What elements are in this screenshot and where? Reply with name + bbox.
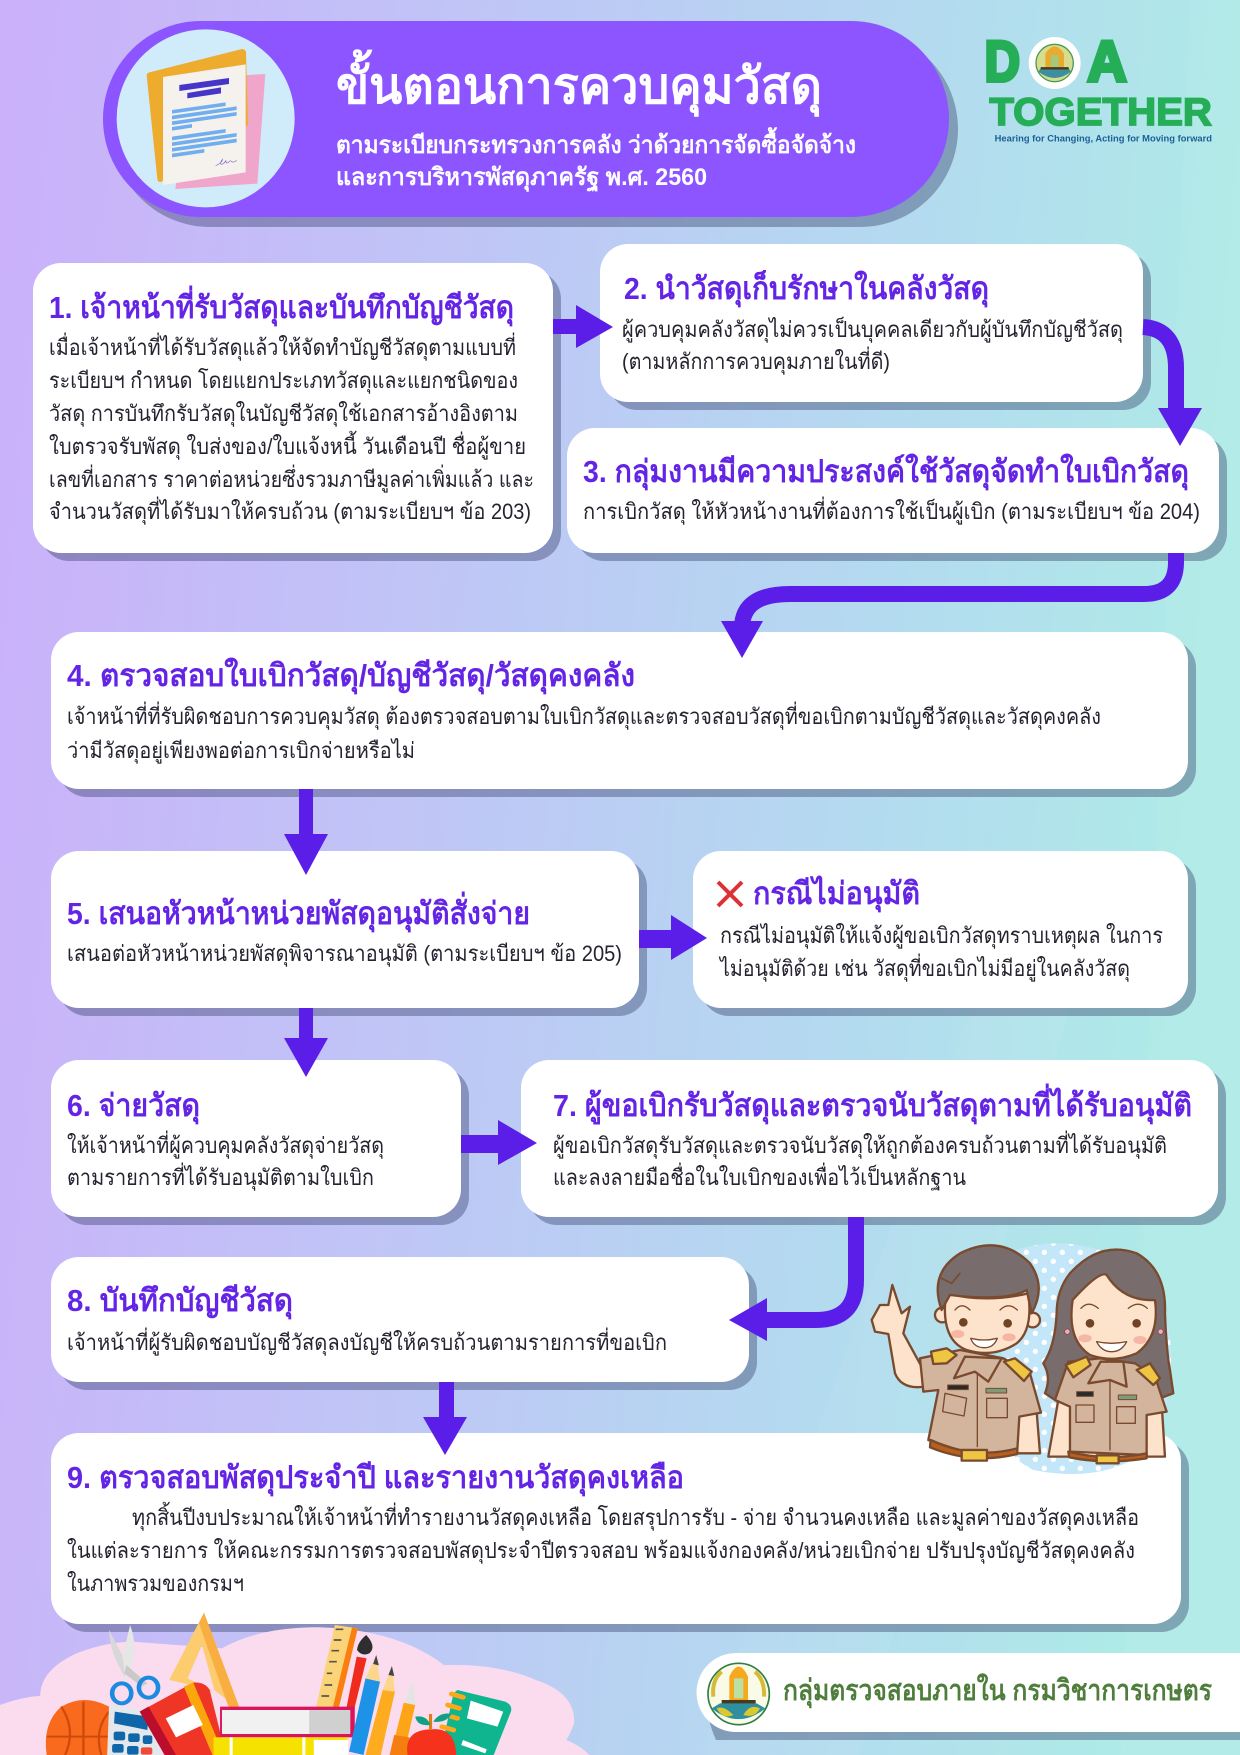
- step 3 heading: 3. กลุ่มงานมีความประสงค์ใช้วัสดุจัดทำใบเบิกวัสดุ: [583, 453, 1189, 491]
- arrow: step 6 to 7: [461, 1120, 537, 1165]
- illustration: school supplies on pink cloud: [0, 1613, 589, 1755]
- subtitle: ตามระเบียบกระทรวงการคลัง ว่าด้วยการจัดซื้อจัดจ้าง: [336, 126, 856, 159]
- step 8 body: เจ้าหน้าที่ผู้รับผิดชอบบัญชีวัสดุลงบัญชีให้ครบถ้วนตามรายการที่ขอเบิก: [67, 1327, 667, 1356]
- subtitle: และการบริหารพัสดุภาครัฐ พ.ศ. 2560: [336, 164, 707, 193]
- step 5 heading: 5. เสนอหัวหน้าหน่วยพัสดุอนุมัติสั่งจ่าย: [67, 891, 530, 933]
- footer shadow: [707, 1661, 1240, 1740]
- panel: step 9: [51, 1433, 1189, 1632]
- step 4 heading: 4. ตรวจสอบใบเบิกวัสดุ/บัญชีวัสดุ/วัสดุคงคลัง: [67, 657, 635, 695]
- step 4 body: [67, 701, 1101, 764]
- not approved body: ไม่อนุมัติด้วย เช่น วัสดุที่ขอเบิกไม่มีอยู่ในคลังวัสดุ: [718, 953, 1130, 982]
- illustration: two officials in uniform: [872, 1243, 1173, 1474]
- panel: step 6: [51, 1060, 469, 1225]
- woman arms: [1048, 1400, 1165, 1457]
- step 7 body: และลงลายมือชื่อในใบเบิกของเพื่อไว้เป็นหลักฐาน: [553, 1162, 966, 1191]
- woman face: [1071, 1274, 1156, 1359]
- step 1 body: ระเบียบฯ กำหนด โดยแยกประเภทวัสดุและแยกชนิดของ: [49, 368, 518, 394]
- not approved body: [718, 923, 1163, 982]
- panel: step 1: [33, 263, 561, 561]
- step 7 heading: 7. ผู้ขอเบิกรับวัสดุและตรวจนับวัสดุตามที่ได้รับอนุมัติ: [553, 1083, 1192, 1125]
- logo: DOA Together: [985, 30, 1212, 143]
- man arm right: [1017, 1412, 1040, 1453]
- arrow: step 3 to 4: [721, 553, 1176, 658]
- arrow: step 5 to 6: [284, 1008, 328, 1077]
- step 2 body: (ตามหลักการควบคุมภายในที่ดี): [622, 346, 890, 375]
- arrow: step 1 to 2: [553, 305, 613, 348]
- step 1 body: วัสดุ การบันทึกรับวัสดุในบัญชีวัสดุใช้เอกสารอ้างอิงตาม: [49, 401, 518, 427]
- emblem: department seal: [708, 1663, 769, 1725]
- subtitle: [336, 126, 856, 193]
- logo: DOA Together: A: [1087, 30, 1127, 94]
- step 1 body: จำนวนวัสดุที่ได้รับมาให้ครบถ้วน (ตามระเบียบฯ ข้อ 203): [49, 496, 531, 525]
- footer badge: [696, 1653, 1240, 1740]
- scissors: [109, 1625, 158, 1703]
- woman hair: [1043, 1250, 1173, 1403]
- step 6 body: [67, 1130, 384, 1191]
- man head: [935, 1308, 950, 1322]
- footer pill: [696, 1653, 1240, 1732]
- step 3 body: การเบิกวัสดุ ให้หัวหน้างานที่ต้องการใช้เป็นผู้เบิก (ตามระเบียบฯ ข้อ 204): [583, 496, 1200, 525]
- icon: documents in circle: [117, 29, 295, 207]
- step 1 body: [49, 332, 534, 525]
- step 7 body: [553, 1130, 1167, 1191]
- arrow: step 5 to not approved: [639, 915, 707, 960]
- books: [214, 1707, 355, 1755]
- arrow: step 8 to 9: [423, 1382, 467, 1455]
- apple: [407, 1714, 456, 1755]
- step 6 heading: 6. จ่ายวัสดุ: [67, 1088, 200, 1125]
- step 6 body: ตามรายการที่ได้รับอนุมัติตามใบเบิก: [67, 1162, 374, 1191]
- step 1 body: ใบตรวจรับพัสดุ ใบส่งของ/ใบแจ้งหนี้ วันเดือนปี ชื่อผู้ขาย: [49, 431, 526, 460]
- step 9 body: ในภาพรวมของกรมฯ: [67, 1571, 244, 1596]
- title: ขั้นตอนการควบคุมวัสดุ: [336, 49, 822, 117]
- step 8 heading: 8. บันทึกบัญชีวัสดุ: [67, 1283, 293, 1320]
- ruler: [316, 1625, 358, 1708]
- step 2 heading: 2. นำวัสดุเก็บรักษาในคลังวัสดุ: [624, 269, 989, 308]
- step 6 body: ให้เจ้าหน้าที่ผู้ควบคุมคลังวัสดุจ่ายวัสดุ: [67, 1130, 384, 1159]
- pink cloud: [0, 1627, 589, 1755]
- arrow: step 7 to 8: [729, 1217, 856, 1341]
- step 5 body: เสนอต่อหัวหน้าหน่วยพัสดุพิจารณาอนุมัติ (ตามระเบียบฯ ข้อ 205): [67, 941, 622, 967]
- step 9 body: ทุกสิ้นปีงบประมาณให้เจ้าหน้าที่ทำรายงานวัสดุคงเหลือ โดยสรุปการรับ - จ่าย จำนวนคงเหลือ และมูลค่าของวัสดุคงเหลือ: [132, 1502, 1139, 1531]
- woman shirt: [1055, 1358, 1167, 1455]
- panel: step 5: [51, 851, 647, 1016]
- panel: step 2: [600, 244, 1151, 410]
- logo: DOA Together: TOGETHER: [989, 90, 1212, 134]
- green notebook: [440, 1690, 511, 1755]
- banner pill: [103, 21, 949, 217]
- arrow: step 4 to 5: [284, 789, 328, 875]
- step 9 body: ในแต่ละรายการ ให้คณะกรรมการตรวจสอบพัสดุประจำปีตรวจสอบ พร้อมแจ้งกองคลัง/หน่วยเบิกจ่าย ปรับปรุงบัญชีวัสดุคงคลัง: [67, 1538, 1135, 1564]
- not approved body: กรณีไม่อนุมัติให้แจ้งผู้ขอเบิกวัสดุทราบเหตุผล ในการ: [720, 923, 1163, 949]
- red notebook: [140, 1683, 226, 1755]
- logo: DOA Together: D: [985, 30, 1020, 94]
- pencils: [349, 1655, 415, 1755]
- step 1 body: เลขที่เอกสาร ราคาต่อหน่วยซึ่งรวมภาษีมูลค่าเพิ่มแล้ว และ: [49, 464, 534, 493]
- man shirt: [920, 1350, 1041, 1455]
- step 1 heading: 1. เจ้าหน้าที่รับวัสดุและบันทึกบัญชีวัสดุ: [49, 285, 514, 327]
- panel: step 3: [567, 428, 1227, 561]
- step 9 body: [67, 1502, 1139, 1596]
- step 2 body: ผู้ควบคุมคลังวัสดุไม่ควรเป็นบุคคลเดียวกับผู้บันทึกบัญชีวัสดุ: [622, 315, 1123, 343]
- step 2 body: [622, 315, 1123, 375]
- panel: step 8: [51, 1257, 757, 1390]
- logo: DOA Together: Hearing for Changing, Acting for Moving forward: [995, 133, 1212, 143]
- step 4 body: เจ้าหน้าที่ที่รับผิดชอบการควบคุมวัสดุ ต้องตรวจสอบตามใบเบิกวัสดุและตรวจสอบวัสดุที่ขอเบิกตามบัญชีวัสดุและวัสดุคงคลัง: [67, 701, 1101, 730]
- set square: [169, 1613, 240, 1710]
- not approved heading: กรณีไม่อนุมัติ: [753, 875, 920, 913]
- step 1 body: เมื่อเจ้าหน้าที่ได้รับวัสดุแล้วให้จัดทำบัญชีวัสดุตามแบบที่: [49, 332, 516, 361]
- icon: red cross: [718, 882, 742, 906]
- man arm: [872, 1285, 925, 1387]
- dotted blue backdrop: [998, 1243, 1171, 1474]
- banner shadow: [112, 31, 958, 227]
- panel: step 7: [521, 1060, 1226, 1225]
- step 4 body: ว่ามีวัสดุอยู่เพียงพอต่อการเบิกจ่ายหรือไม่: [67, 738, 415, 764]
- calculator: [107, 1705, 161, 1755]
- paint brush: [346, 1635, 372, 1710]
- header banner: [103, 21, 958, 227]
- logo emblem: [1029, 37, 1081, 89]
- arrow: step 2 to 3: [1143, 327, 1202, 446]
- step 7 body: ผู้ขอเบิกวัสดุรับวัสดุและตรวจนับวัสดุให้ถูกต้องครบถ้วนตามที่ได้รับอนุมัติ: [553, 1130, 1167, 1159]
- panel: not approved: [693, 851, 1196, 1016]
- panel: step 4: [51, 632, 1196, 797]
- basketball: [46, 1700, 109, 1755]
- step 9 heading: 9. ตรวจสอบพัสดุประจำปี และรายงานวัสดุคงเหลือ: [67, 1460, 684, 1497]
